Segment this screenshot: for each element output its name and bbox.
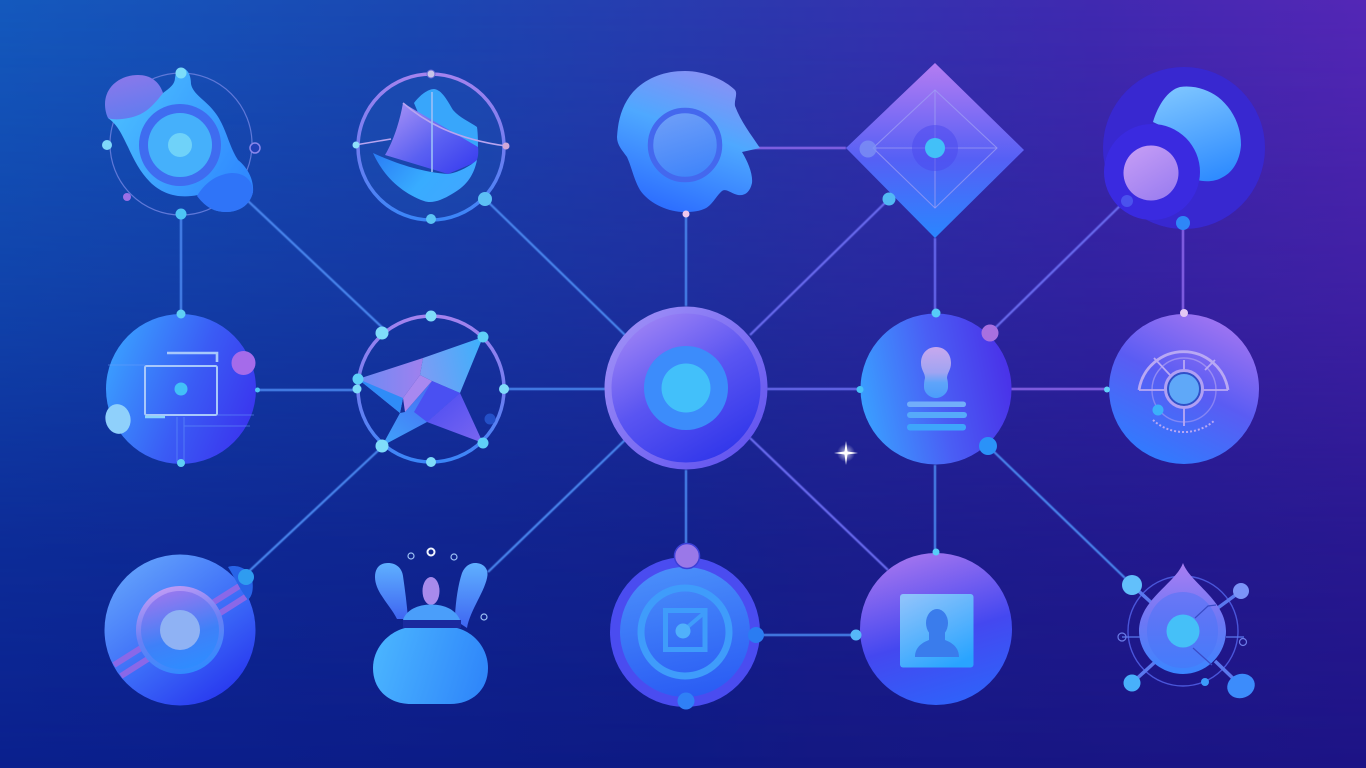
front sail: [385, 103, 478, 174]
blue lobe: [197, 173, 253, 212]
edge dots: [674, 544, 764, 710]
node: profile and text lines: [856, 308, 1012, 464]
node: diamond: [846, 63, 1024, 238]
node: radar dial: [1104, 309, 1259, 464]
connector lines: [181, 148, 1183, 635]
pale blob: [103, 402, 133, 436]
centre target: [912, 125, 958, 171]
ring dots: [352, 70, 510, 224]
bubbles: [408, 548, 487, 620]
back cyan sail: [414, 89, 478, 165]
node: disc with stripe: [104, 554, 256, 706]
photo card: [900, 594, 974, 668]
laptop icon: [108, 353, 254, 462]
pink dot: [1124, 146, 1178, 200]
band: [403, 620, 461, 628]
sparkle: [834, 441, 858, 465]
edge dots: [176, 310, 260, 467]
ring dots: [352, 310, 509, 467]
lid: [403, 604, 460, 620]
drop core: [1166, 614, 1200, 648]
drop body: [1139, 563, 1226, 674]
target: [139, 104, 221, 186]
node: star in ring: [352, 310, 509, 467]
edge dots: [1104, 309, 1188, 392]
dial dot: [1152, 404, 1164, 416]
node: laptop circle: [103, 310, 260, 467]
body: [373, 628, 488, 704]
ears: [375, 563, 408, 619]
node: central hub: [604, 306, 768, 470]
node: pouch: [373, 548, 488, 704]
rigging: [355, 92, 506, 172]
node: framed dial: [610, 544, 764, 710]
person silhouette: [915, 609, 959, 657]
node: bubble with pink dot: [1103, 67, 1265, 230]
concentric centre: [136, 586, 224, 674]
dial hub: [1168, 373, 1200, 405]
edge dots: [856, 308, 998, 455]
node: boat in ring: [352, 70, 510, 224]
blue blob: [1153, 87, 1241, 181]
inner diamond grid: [873, 90, 997, 208]
connector cap: [228, 566, 253, 600]
lower-left dot: [882, 192, 896, 206]
centre petal: [422, 577, 440, 605]
node: top-left blob with target: [102, 68, 260, 220]
node: portrait card: [850, 548, 1012, 705]
keyhole figure: [921, 347, 951, 398]
purple lobe: [105, 75, 163, 119]
star facets: [358, 337, 483, 446]
hull: [373, 153, 477, 202]
overlapping dark circle: [1104, 124, 1200, 220]
dial rings: [1139, 352, 1228, 432]
purple dot: [232, 351, 256, 375]
left dot: [860, 140, 876, 158]
node: head silhouette: [617, 71, 760, 218]
stripe: [114, 585, 247, 676]
node: droplet with satellites: [1118, 563, 1258, 702]
orbit dots: [102, 68, 260, 220]
satellites: [1118, 575, 1258, 702]
neck dot: [682, 210, 690, 218]
text lines: [907, 402, 967, 430]
connector dots: [1121, 195, 1190, 230]
square icon: [666, 610, 705, 650]
edge dots: [850, 548, 940, 640]
laptop dot: [174, 382, 188, 396]
head ring: [650, 110, 720, 180]
